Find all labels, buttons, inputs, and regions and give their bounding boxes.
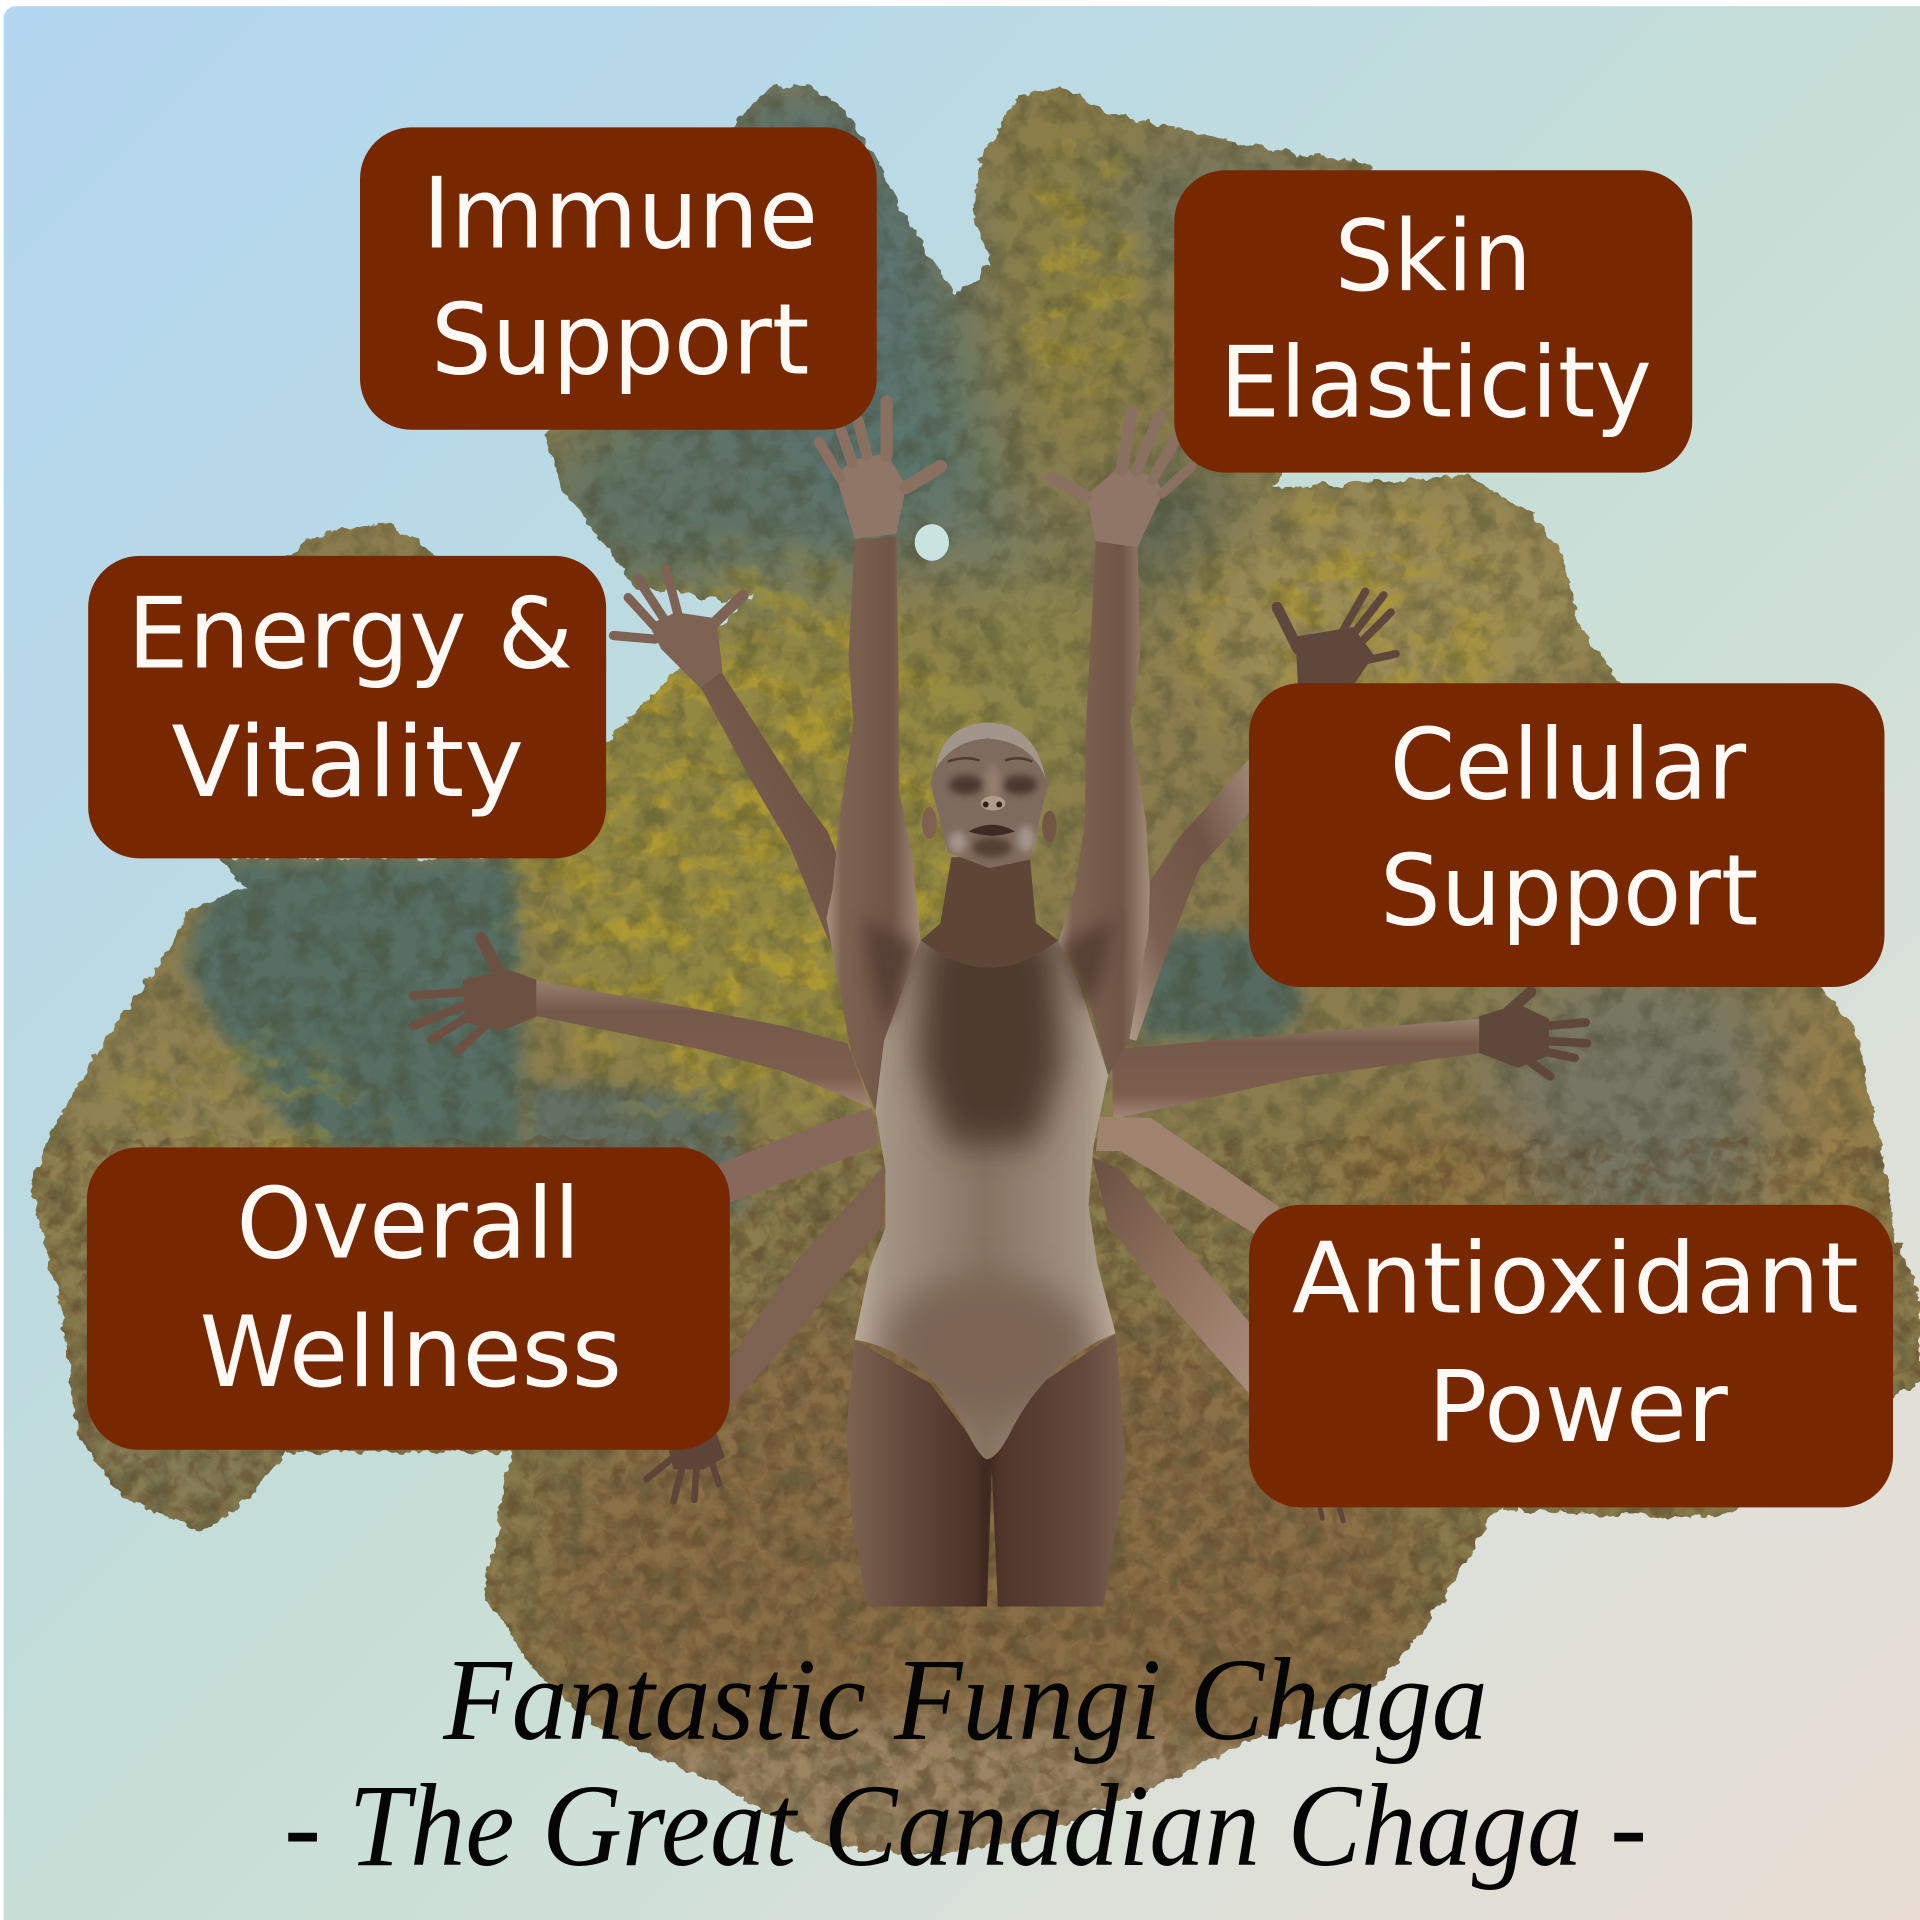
panel: Skin Elasticity: Elasticity <box>1220 326 1652 440</box>
panel: Cellular Support <box>1249 683 1884 987</box>
hand: raised right <box>1052 411 1191 547</box>
title: - The Great Canadian Chaga - <box>284 1761 1647 1891</box>
panel: Antioxidant Power: Power <box>1428 1351 1728 1465</box>
panel: Energy and Vitality: Energy & <box>127 577 573 691</box>
yellow lichen patches <box>128 140 1504 1148</box>
back arms <box>413 569 1587 1521</box>
panel: Cellular Support: Support <box>1380 834 1758 948</box>
arm: lowest left <box>686 1166 884 1451</box>
hand: middle right <box>1479 992 1587 1076</box>
grey teal patch <box>529 1084 747 1224</box>
head <box>922 722 1057 868</box>
arm: upper second right <box>1128 757 1251 1041</box>
arm: middle right <box>1112 1019 1483 1119</box>
panel: Overall Wellness: Wellness <box>200 1296 622 1410</box>
arm: lower middle right <box>1096 1117 1280 1234</box>
panel: Overall Wellness <box>87 1147 730 1450</box>
hand: middle left <box>413 938 536 1051</box>
raised left arm <box>819 402 940 1111</box>
dark teal left panel <box>184 858 524 1151</box>
title: Fantastic Fungi Chaga <box>442 1635 1488 1765</box>
armpit shadows <box>863 918 1113 1029</box>
dark teal right patch <box>1139 931 1300 1041</box>
pebble texture <box>0 1139 1920 1920</box>
arm: lower middle left <box>719 1108 879 1202</box>
arm: lowest right <box>1092 1157 1251 1396</box>
sky gap between lobes <box>915 524 949 561</box>
neck <box>921 857 1058 967</box>
panel: Energy and Vitality: Vitality <box>171 706 524 820</box>
legs <box>846 1333 1127 1607</box>
fingertips below antioxidant panel <box>1320 1509 1343 1521</box>
belly shading <box>883 1273 1091 1420</box>
title <box>284 1635 1647 1891</box>
panel: Energy and Vitality <box>88 556 606 858</box>
hand: upper second left <box>613 569 743 688</box>
panel: Antioxidant Power: Antioxidant <box>1292 1223 1859 1337</box>
panel: Immune Support <box>360 127 877 430</box>
panel: Cellular Support: Cellular <box>1390 708 1747 822</box>
pale fade toward the title <box>654 1702 1257 1856</box>
panel: Overall Wellness: Overall <box>236 1168 580 1282</box>
hand: upper second right <box>1277 591 1396 686</box>
panel: Immune Support: Support <box>431 283 809 397</box>
leotard torso <box>855 931 1116 1460</box>
panel: Skin Elasticity: Skin <box>1335 200 1532 314</box>
panel: Skin Elasticity <box>1174 170 1692 473</box>
chest shadow <box>918 931 1063 1145</box>
raised right arm <box>1052 411 1191 1075</box>
hand: lowest left <box>647 1433 725 1501</box>
panel: Antioxidant Power <box>1249 1205 1893 1507</box>
arm: upper second left <box>700 670 845 967</box>
arm: middle left <box>531 980 872 1108</box>
hand: raised left <box>819 402 940 539</box>
panel: Immune Support: Immune <box>422 157 818 271</box>
figure with many arms <box>413 402 1587 1607</box>
face shading <box>949 764 1037 857</box>
